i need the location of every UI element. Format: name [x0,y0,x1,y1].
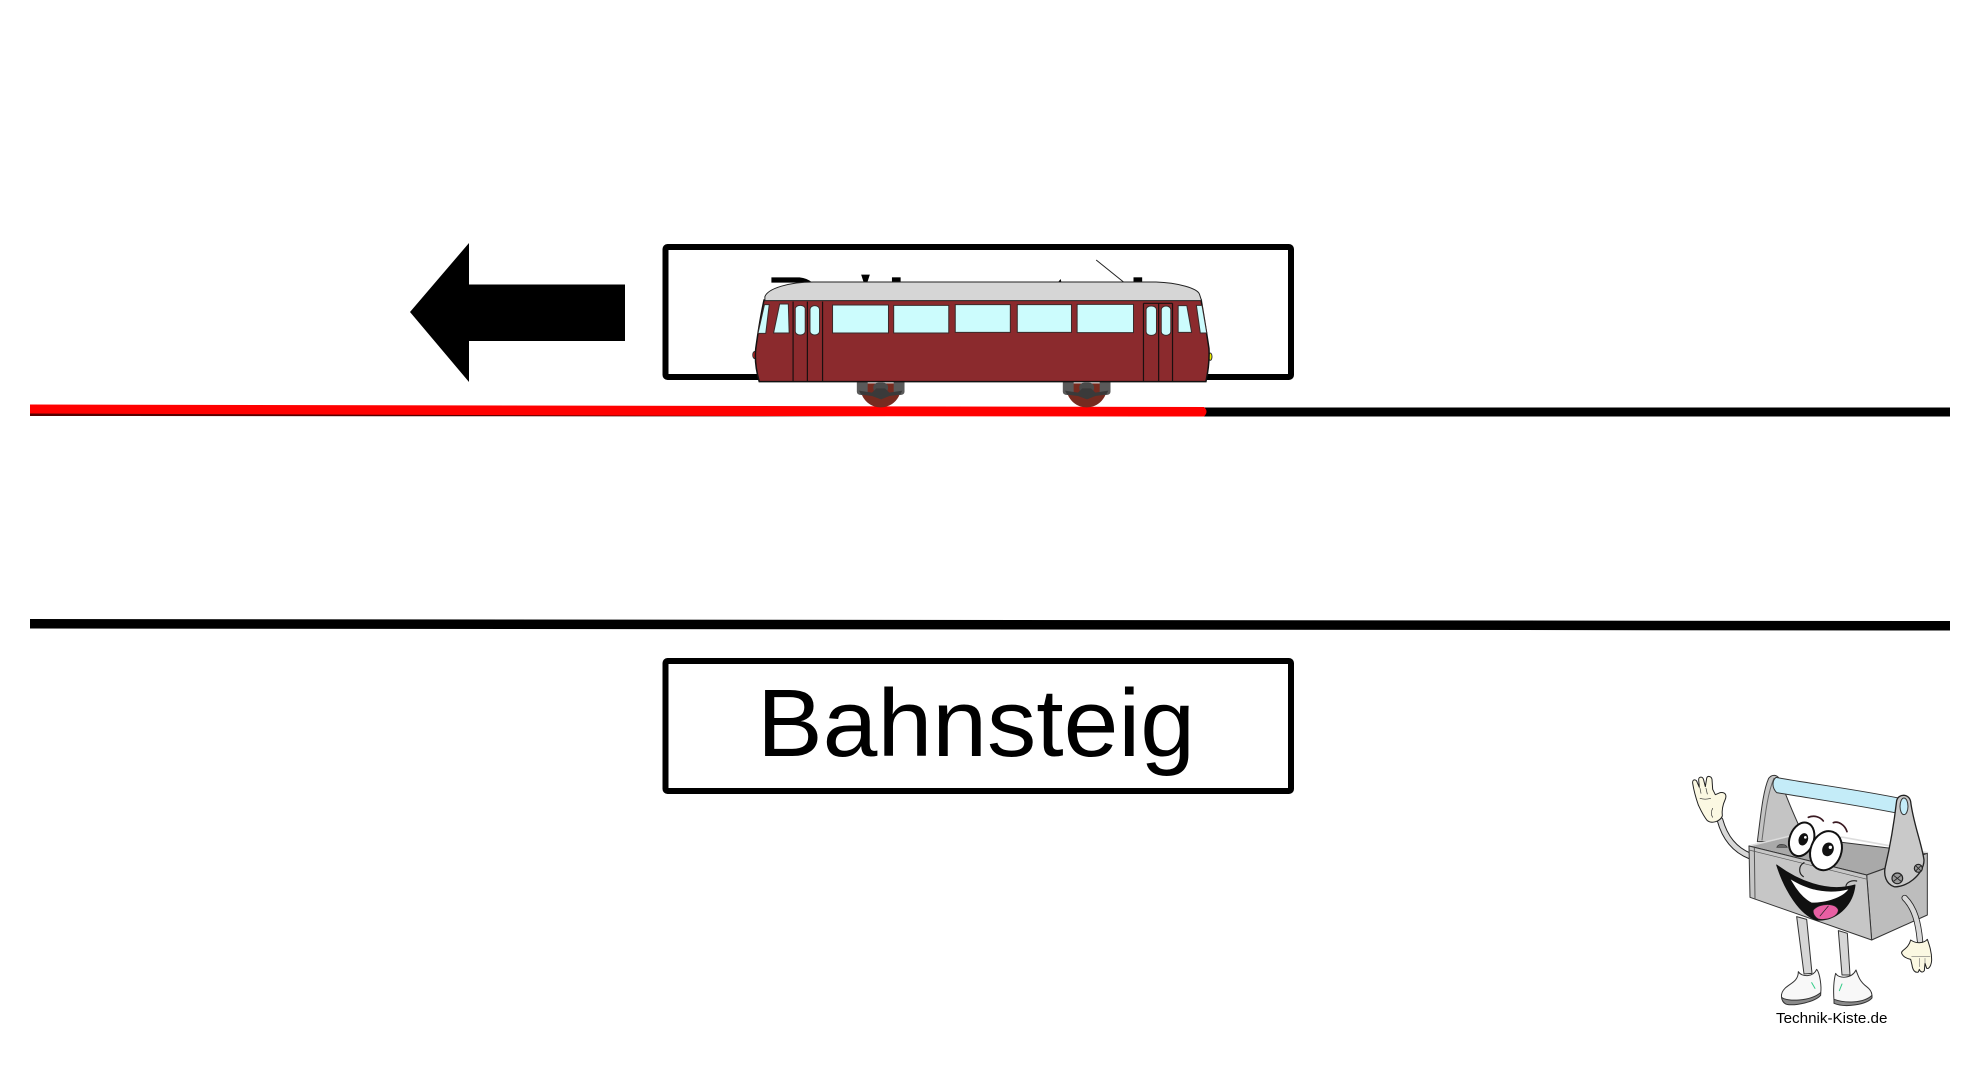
platform label text: Bahnsteig [757,670,1195,777]
teeth [1791,879,1848,903]
car body [755,300,1209,382]
roof equipment [771,260,1142,283]
website credit: Technik-Kiste.de [1776,1010,1887,1027]
platform label box [666,661,1291,791]
train label box [666,247,1291,377]
left hand [1693,776,1726,822]
box interior [1749,836,1927,875]
box front [1749,846,1872,940]
platform edge line [30,619,1950,630]
shoes [1781,969,1872,1006]
mouth [1777,865,1855,920]
direction arrow pointing left [410,243,625,382]
eyebrows [1808,816,1847,832]
right arm [1905,898,1920,941]
right hand [1902,939,1932,972]
railcar [753,260,1212,407]
eyes [1784,819,1847,875]
handle bar [1773,777,1902,814]
tongue [1813,904,1838,919]
cheek [1846,881,1857,886]
bogie left [857,382,905,407]
door lines [793,302,1173,381]
roof [765,282,1202,301]
mascot: toolbox character [1693,775,1932,1006]
track: occupied red section [30,404,1206,416]
handle right plate [1885,795,1924,887]
bolts [1892,864,1922,884]
box side [1867,853,1927,940]
legs [1797,917,1850,975]
handle bar hole [1900,798,1908,815]
left arm [1720,820,1750,856]
bogie right [1063,382,1111,407]
lamps [753,351,1212,360]
handle left post [1757,775,1802,842]
windows [758,304,1207,335]
nose [1800,863,1804,877]
track: black rail [1150,408,1950,416]
